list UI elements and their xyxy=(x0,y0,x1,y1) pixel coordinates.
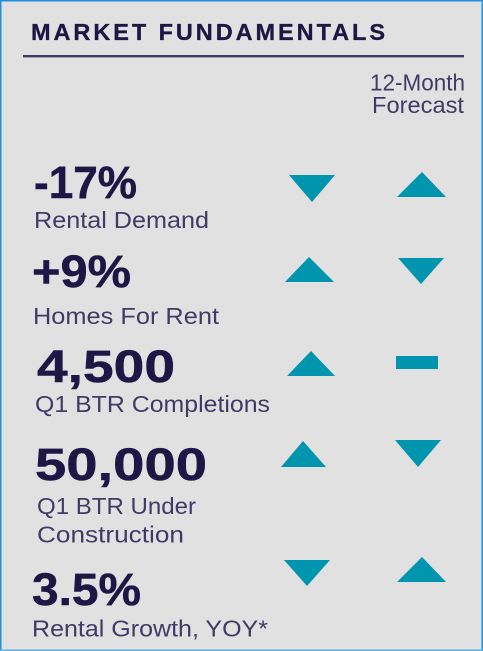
stat: rental demand: -17% xyxy=(34,157,137,208)
title: MARKET FUNDAMENTALS xyxy=(31,19,385,45)
column heading: 12-month forecast: 12-Month xyxy=(370,70,465,96)
stat: homes for rent xyxy=(32,246,220,329)
stat: homes for rent: Homes For Rent xyxy=(33,303,220,329)
column heading: 12-month forecast: Forecast xyxy=(372,92,465,118)
stat: rental demand xyxy=(34,157,209,233)
stat: Q1 BTR under construction: Construction xyxy=(37,522,184,548)
stat: Q1 BTR completions: 4,500 xyxy=(37,341,175,392)
icon: under construction forecast down xyxy=(395,440,441,467)
stat: rental growth: 3.5% xyxy=(32,564,141,615)
icon: homes for rent current up xyxy=(285,257,334,282)
icon: completions current up xyxy=(287,351,335,376)
stat: Q1 BTR under construction: 50,000 xyxy=(35,439,207,490)
icon: rental demand forecast up xyxy=(397,172,446,197)
column heading: 12-month forecast xyxy=(370,70,465,118)
stat: rental growth: Rental Growth, YOY* xyxy=(32,616,268,642)
stat: rental growth xyxy=(32,564,268,642)
icon: completions forecast flat xyxy=(396,356,438,369)
icon: under construction current up xyxy=(281,441,326,467)
icon: rental demand current down xyxy=(289,175,335,202)
stat: Q1 BTR under construction xyxy=(35,439,207,548)
icon: homes for rent forecast down xyxy=(398,258,444,284)
icon: rental growth forecast up xyxy=(397,557,446,582)
stat: Q1 BTR completions: Q1 BTR Completions xyxy=(35,391,270,417)
icon: rental growth current down xyxy=(284,560,330,586)
stat: homes for rent: +9% xyxy=(32,246,131,297)
stat: Q1 BTR under construction: Q1 BTR Under xyxy=(37,493,196,519)
stat: rental demand: Rental Demand xyxy=(34,207,209,233)
stat: Q1 BTR completions xyxy=(35,341,270,417)
